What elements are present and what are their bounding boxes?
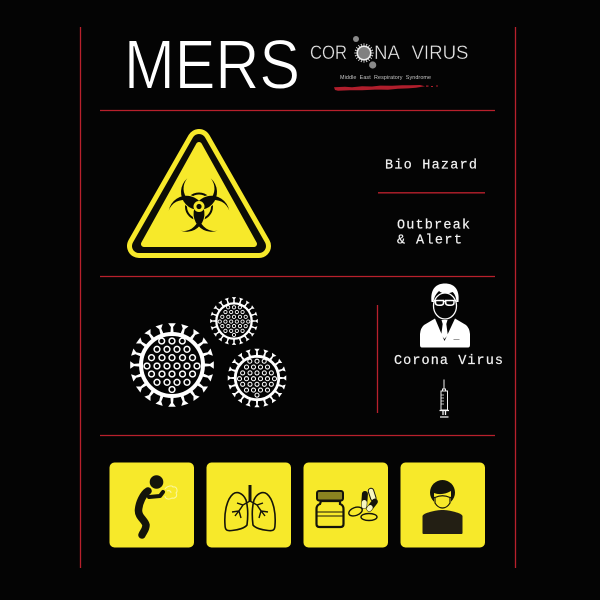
corona virus wordmark: O — [359, 51, 367, 62]
tagline: Middle East Respiratory Syndrome — [340, 75, 431, 81]
bottle cap — [317, 491, 343, 500]
virus: large — [130, 323, 214, 407]
icon: biohazard warning triangle — [139, 141, 259, 246]
icon: syringe — [440, 380, 449, 417]
corona virus wordmark: COR — [310, 42, 347, 64]
pocket — [454, 338, 460, 340]
virus cluster — [130, 297, 286, 407]
label: Corona Virus: Corona Virus — [394, 354, 503, 369]
bottle — [316, 501, 344, 527]
cough cloud — [165, 486, 177, 499]
head — [150, 475, 163, 489]
title: MERS: MERS — [124, 26, 300, 104]
label: Bio Hazard: Bio Hazard — [385, 158, 477, 173]
subtitle: Corona Virus with virus icon — [310, 36, 468, 69]
frame and divider lines — [80, 27, 516, 568]
bronchi — [232, 501, 268, 518]
hair — [430, 480, 455, 505]
shoulders — [422, 510, 462, 534]
jacket — [420, 318, 470, 348]
glasses — [436, 300, 454, 305]
virus: top — [210, 297, 258, 345]
tile: coughing person — [110, 462, 194, 548]
capsule: first — [361, 491, 368, 509]
corona virus wordmark: VIRUS — [412, 42, 468, 64]
icon: doctor — [420, 284, 470, 348]
capsule: second — [368, 488, 377, 502]
arm — [149, 492, 163, 497]
head — [434, 293, 456, 319]
virus: right — [228, 349, 286, 407]
bottle label — [317, 512, 343, 516]
right lung — [252, 493, 275, 531]
icon: small particles — [353, 36, 376, 69]
hair — [431, 284, 459, 302]
label: Outbreak & Alert: & Alert — [397, 233, 462, 248]
tile: lungs — [206, 462, 291, 548]
biohazard symbol — [166, 178, 232, 236]
tie — [441, 320, 448, 339]
body — [138, 491, 148, 535]
tile: medicine — [304, 462, 388, 548]
tile: person with mask — [400, 462, 485, 548]
capsule: third — [365, 497, 379, 513]
tablet: first — [348, 505, 363, 518]
icon: virus letter O — [355, 44, 373, 62]
red brush stroke — [334, 85, 438, 91]
trachea — [248, 485, 252, 501]
face — [434, 491, 451, 509]
tablet: second — [361, 514, 377, 520]
corona virus wordmark: NA — [374, 42, 400, 64]
mask — [432, 496, 454, 508]
label: Outbreak & Alert — [397, 218, 470, 248]
label: Outbreak & Alert: Outbreak — [397, 218, 470, 233]
left lung — [225, 493, 248, 531]
